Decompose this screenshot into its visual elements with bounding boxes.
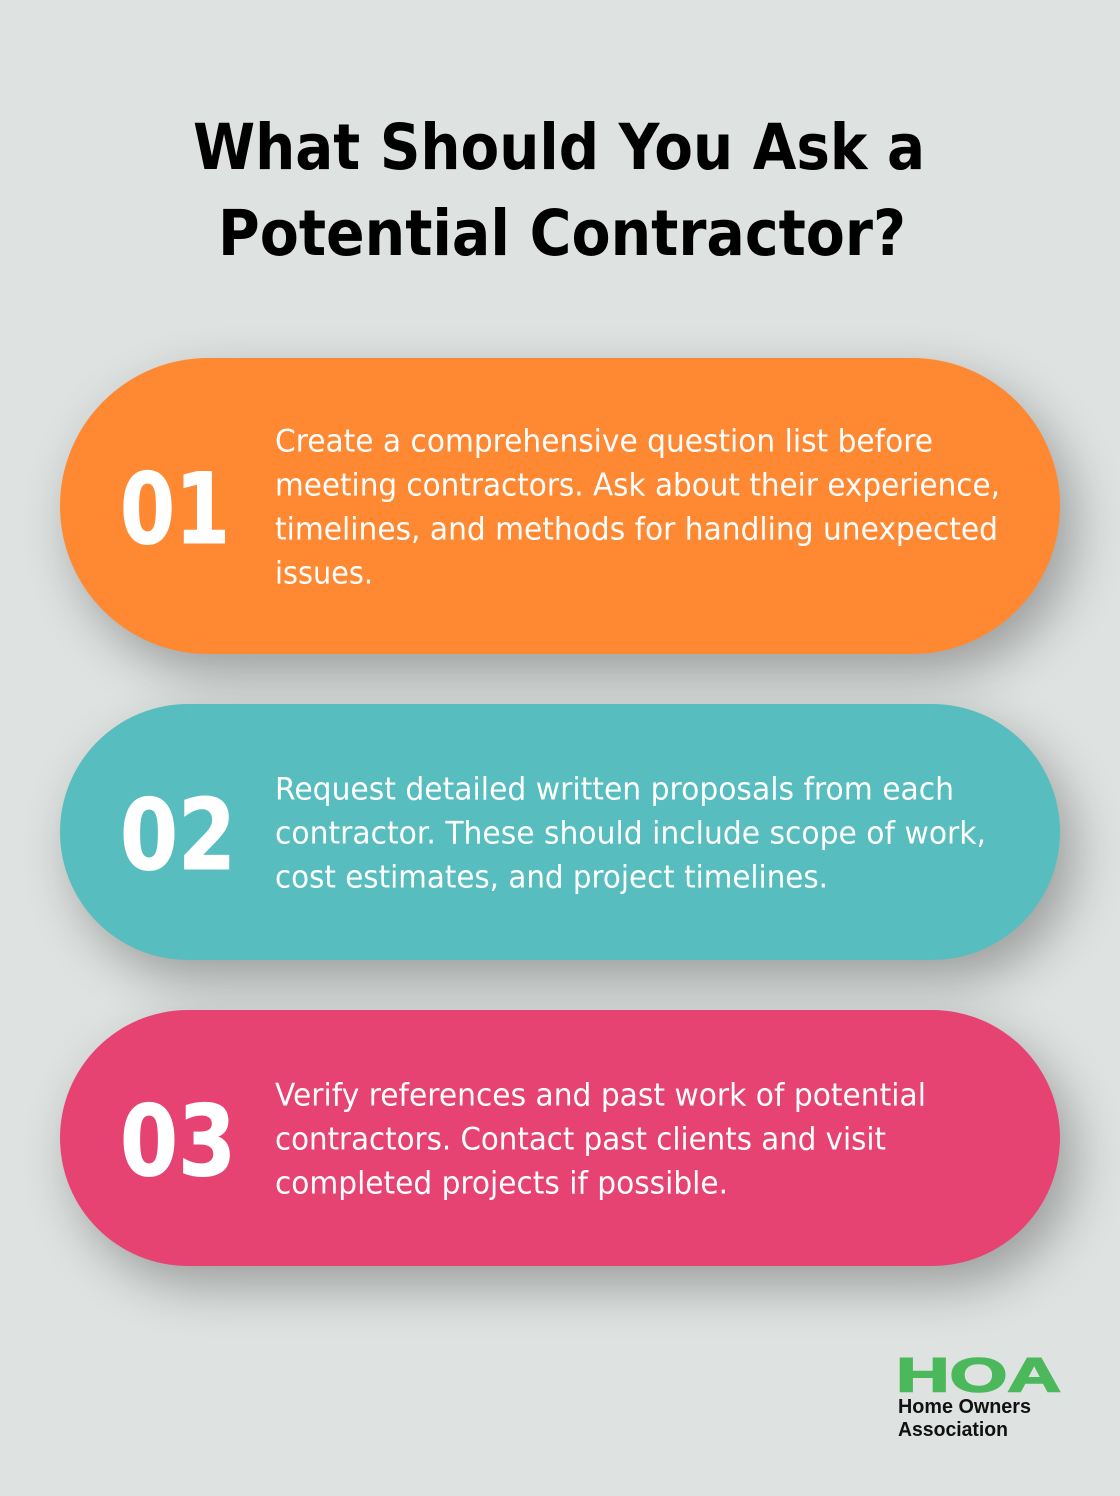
step 3 number: 03: [120, 1085, 236, 1199]
step 1 text: meeting contractors. Ask about their experience,: [275, 468, 1000, 504]
step 2 text: Request detailed written proposals from each: [275, 772, 954, 808]
step 3 text: contractors. Contact past clients and visit: [275, 1122, 886, 1158]
title: What Should You Ask a: [193, 111, 925, 184]
title: [193, 111, 925, 270]
step 1 text: issues.: [275, 556, 373, 592]
logo: HOA Home Owners Association: [896, 1350, 1061, 1441]
step 2 text: contractor. These should include scope of work,: [275, 816, 986, 852]
step 1 number: 01: [120, 453, 230, 567]
panel: step 1 pill: [60, 358, 1060, 654]
step 3 text: Verify references and past work of potential: [275, 1078, 926, 1114]
panel: step 3 pill: [60, 1010, 1060, 1266]
step 2 number: 02: [120, 779, 236, 893]
logo: HOA Home Owners Association: Home Owners: [898, 1396, 1031, 1418]
step 3 text: completed projects if possible.: [275, 1166, 728, 1202]
panel: step 2 pill: [60, 704, 1060, 960]
step 1 text: Create a comprehensive question list before: [275, 424, 933, 460]
step 2 text: cost estimates, and project timelines.: [275, 860, 828, 896]
step 3 text: [275, 1078, 926, 1202]
logo: HOA Home Owners Association: Association: [898, 1419, 1008, 1441]
title: Potential Contractor?: [218, 197, 906, 270]
logo: HOA Home Owners Association: HOA: [896, 1350, 1061, 1402]
step 2 text: [275, 772, 986, 896]
step 1 text: [275, 424, 1000, 592]
step 1 text: timelines, and methods for handling unexpected: [275, 512, 998, 548]
